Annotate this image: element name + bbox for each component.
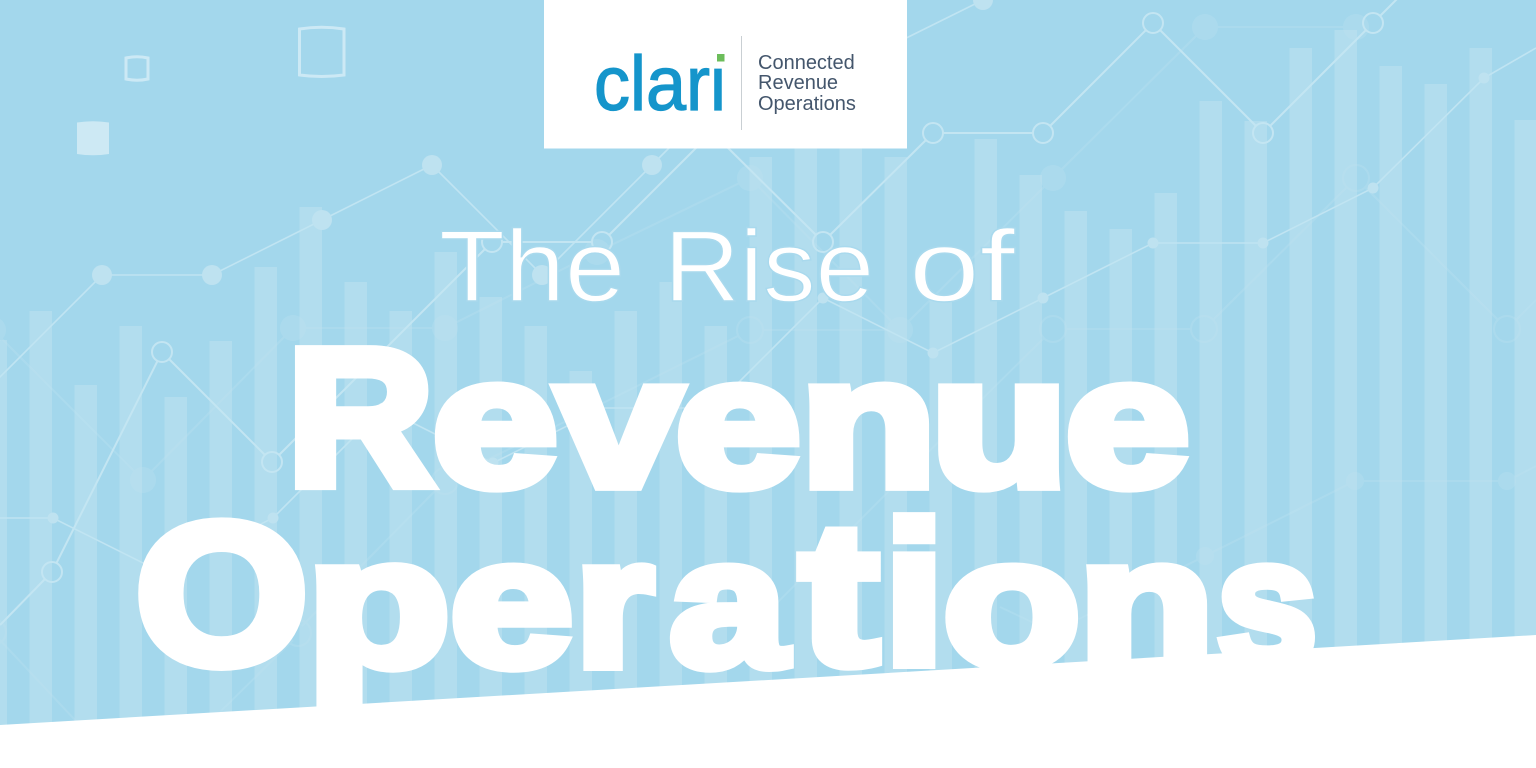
faint line series: outlined nodes	[0, 165, 1536, 720]
heading: Operations: r	[575, 502, 653, 704]
heading: Revenue: v	[557, 321, 681, 525]
heading: Operations: t	[800, 483, 878, 706]
logo tagline: Revenue	[758, 72, 838, 94]
heading: Operations: p	[307, 502, 450, 704]
heading: Operations: a	[670, 502, 789, 704]
heading: Operations: O	[136, 482, 308, 706]
heading: Operations: n	[1079, 501, 1214, 704]
white diagonal footer	[0, 635, 1536, 768]
logo tagline: Operations	[758, 93, 856, 115]
heading: The Rise of: Rise	[664, 211, 874, 323]
heading: Revenue: R	[288, 309, 433, 525]
heading: Revenue: n	[801, 321, 936, 525]
logo wordmark: clari: clari	[594, 41, 726, 127]
icon: filled square	[77, 121, 109, 155]
line chart: outlined nodes	[0, 0, 1402, 625]
heading: Operations: s	[1217, 502, 1317, 705]
heading: Revenue: e	[1066, 321, 1189, 525]
panel: logo box	[544, 0, 907, 148]
heading: Operations	[136, 482, 1317, 706]
heading: The Rise of: The	[439, 211, 625, 323]
logo tagline	[758, 52, 856, 115]
heading: The Rise of	[439, 211, 1016, 323]
heading: Revenue: e	[676, 321, 800, 525]
heading: Revenue: u	[931, 321, 1068, 525]
heading: Operations: o	[943, 502, 1080, 705]
line chart: small filled nodes	[0, 48, 1536, 573]
heading: The Rise of: of	[909, 211, 1016, 323]
heading: Operations: i	[884, 482, 944, 705]
logo tagline: Connected	[758, 52, 855, 74]
heading: Revenue	[288, 309, 1189, 525]
heading: Revenue: e	[433, 321, 557, 525]
icon: large outlined square	[300, 27, 344, 76]
icon: small outlined square	[126, 57, 148, 80]
line chart: large filled nodes	[0, 0, 993, 385]
heading: Operations: e	[450, 501, 573, 704]
logo divider	[741, 36, 742, 130]
